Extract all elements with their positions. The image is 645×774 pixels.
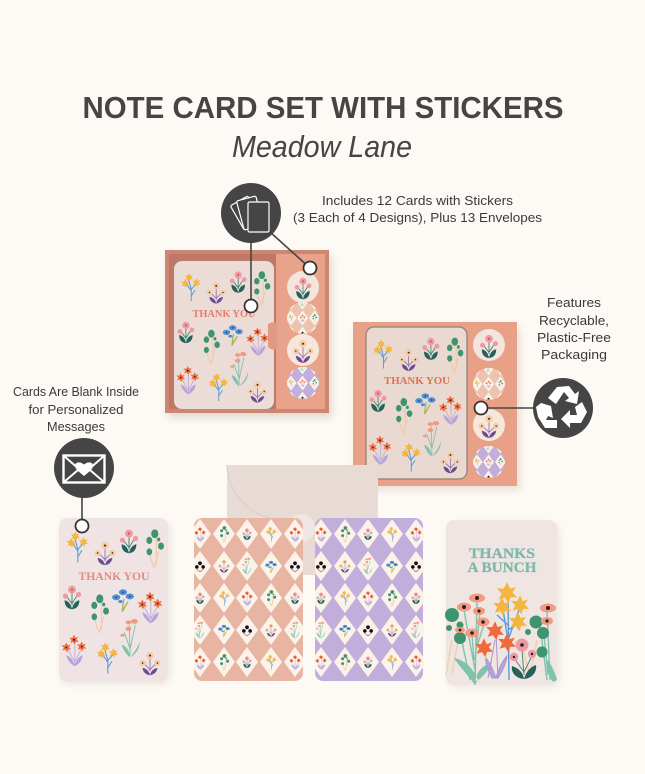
callout: recyclable packaging <box>474 378 593 438</box>
callout text: packaging: Features <box>547 295 602 310</box>
flat box front with window and stickers <box>353 322 520 502</box>
callout text: packaging: Packaging <box>541 347 607 362</box>
callout text: includes: (3 Each of 4 Designs), Plus 13 Envelopes <box>293 210 543 225</box>
callout text: packaging: Plastic-Free <box>537 330 611 345</box>
windowed thank you card <box>366 327 467 479</box>
icon: envelope with heart <box>64 456 104 482</box>
sticker sheet <box>268 254 332 422</box>
card: thanks a bunch <box>445 520 559 687</box>
boxed thank you card <box>174 261 274 409</box>
callout text: blank inside: Cards Are Blank Inside <box>13 384 139 399</box>
card: thank you: THANK YOU <box>78 569 150 583</box>
meadow illustration <box>445 582 557 685</box>
boxed thank you card: THANK YOU <box>192 309 256 320</box>
icon: stacked cards <box>230 196 269 232</box>
callout text: includes <box>293 193 543 225</box>
card: peach diamond pattern <box>189 518 306 681</box>
card heading: A BUNCH <box>468 560 537 576</box>
callout text: packaging <box>537 295 611 362</box>
callout: blank inside <box>54 438 114 532</box>
callout text: blank inside <box>13 384 139 434</box>
window stickers <box>460 329 518 502</box>
callout text: blank inside: Messages <box>47 419 105 434</box>
subtitle: Meadow Lane <box>232 129 412 164</box>
open box with cards and stickers <box>165 250 332 422</box>
windowed thank you card: THANK YOU <box>384 376 450 387</box>
card: thank you <box>59 518 170 684</box>
card heading <box>468 546 537 576</box>
callout text: blank inside: for Personalized <box>28 402 124 417</box>
card: lilac diamond pattern <box>310 518 427 681</box>
callout: cards and stickers contents <box>221 183 316 312</box>
title: NOTE CARD SET WITH STICKERS <box>82 90 564 125</box>
callout text: packaging: Recyclable, <box>539 313 609 328</box>
envelope <box>227 465 378 575</box>
icon: recycle arrows <box>536 386 587 428</box>
callout text: includes: Includes 12 Cards with Stickers <box>322 193 514 208</box>
card heading: THANKS <box>469 546 535 562</box>
